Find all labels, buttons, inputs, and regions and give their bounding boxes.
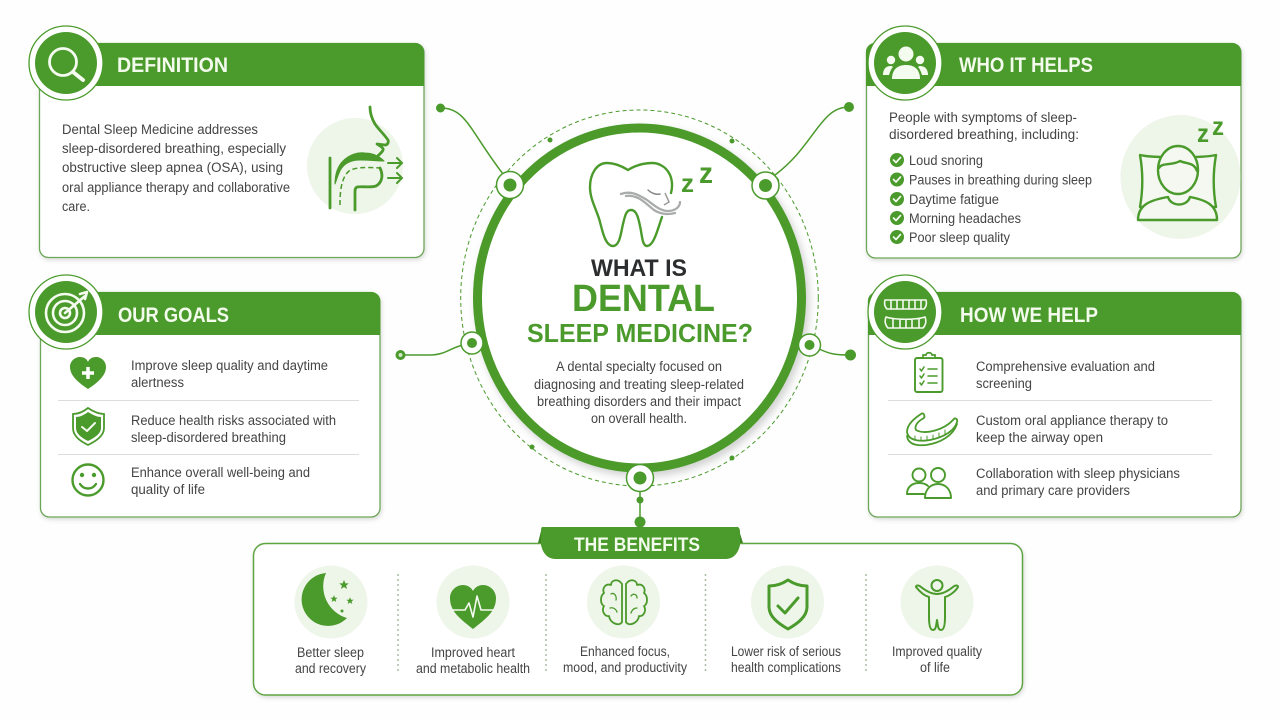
help 1: Comprehensive evaluation and	[976, 359, 1155, 374]
help 3: and primary care providers	[976, 483, 1130, 498]
panel: our goals	[29, 275, 380, 517]
icon: oral appliance	[907, 413, 957, 445]
node: top right	[752, 172, 779, 199]
centre description: breathing disorders and their impact	[537, 394, 741, 409]
icon: clipboard	[915, 353, 942, 392]
definition text	[62, 122, 290, 214]
goal 1	[70, 357, 328, 390]
connector: our goals to centre	[396, 345, 463, 360]
help 3: Collaboration with sleep physicians	[976, 466, 1180, 481]
panel: the benefits	[254, 527, 1022, 695]
benefit 5: of life	[920, 660, 950, 675]
central circle	[461, 110, 820, 492]
panel: who it helps	[866, 26, 1241, 258]
goal 3: Enhance overall well-being and	[131, 465, 310, 480]
connector: benefits to centre	[634, 490, 646, 528]
symptoms list: Daytime fatigue	[909, 192, 999, 207]
how heading: HOW WE HELP	[960, 304, 1098, 327]
symptoms list	[890, 153, 1092, 245]
symptoms list: Morning headaches	[909, 211, 1021, 226]
benefit 3: Enhanced focus,	[580, 644, 670, 659]
help 2	[907, 413, 1168, 445]
symptoms list: Loud snoring	[909, 153, 983, 168]
goal 2: sleep-disordered breathing	[131, 430, 286, 445]
centre description: on overall health.	[591, 411, 687, 426]
node: right	[798, 334, 820, 356]
centre description	[534, 359, 744, 426]
benefit 4: Lower risk of serious	[731, 644, 841, 659]
panel: how we help	[868, 275, 1241, 517]
icon: two people	[907, 468, 951, 498]
benefit 3: mood, and productivity	[563, 660, 687, 675]
icon: sleeping person: z	[1212, 113, 1224, 141]
symptoms list: Pauses in breathing during sleep	[909, 172, 1092, 188]
centre description: diagnosing and treating sleep-related	[534, 377, 744, 392]
title	[527, 255, 753, 348]
how header bar	[868, 292, 1241, 335]
benefit 4	[731, 566, 841, 675]
icon: sleeping person: z	[1197, 118, 1209, 148]
benefit 2: Improved heart	[431, 645, 515, 660]
benefit 1: and recovery	[295, 661, 366, 676]
benefit 5: Improved quality	[892, 644, 982, 659]
icon: shield with check	[769, 580, 807, 629]
node: left	[461, 332, 483, 354]
node: bottom	[626, 464, 654, 492]
icon: person with raised arms	[916, 580, 958, 630]
definition text: obstructive sleep apnea (OSA), using	[62, 160, 283, 175]
definition text: sleep-disordered breathing, especially	[62, 141, 286, 156]
title: SLEEP MEDICINE?	[527, 318, 753, 348]
goals badge: target	[29, 275, 103, 349]
benefit 3	[563, 566, 687, 675]
symptoms list: Poor sleep quality	[909, 230, 1010, 245]
who badge: people	[868, 26, 942, 100]
icon: moon and stars	[302, 573, 354, 626]
definition heading: DEFINITION	[117, 54, 228, 77]
goal 3	[72, 464, 310, 497]
help 2: keep the airway open	[976, 430, 1103, 445]
help 3	[907, 466, 1180, 498]
icon: smiley	[72, 464, 104, 496]
connector: how we help to centre	[819, 349, 856, 360]
who intro text: People with symptoms of sleep-	[889, 110, 1077, 125]
goal 1: alertness	[131, 375, 184, 390]
centre description: A dental specialty focused on	[556, 359, 722, 374]
icon: sleeping person	[1120, 113, 1240, 239]
benefit 2	[416, 566, 530, 676]
goal 2	[73, 408, 336, 445]
who intro text: disordered breathing, including:	[889, 127, 1079, 142]
icon: sleeping tooth: z	[699, 157, 713, 190]
goals header bar	[40, 292, 380, 335]
definition badge: magnifier	[29, 26, 103, 100]
icon: airway profile	[307, 107, 403, 214]
benefit 1: Better sleep	[297, 645, 364, 660]
icon: sleeping tooth	[590, 157, 713, 246]
connector: who it helps to centre	[775, 102, 854, 175]
benefits banner	[538, 527, 743, 559]
icon: shield with check	[73, 408, 104, 445]
node: top left	[496, 172, 524, 198]
icon: heart with pulse	[450, 585, 496, 629]
benefit 1	[294, 566, 368, 676]
how badge: dentures	[868, 275, 942, 349]
help 1: screening	[976, 376, 1032, 391]
who heading: WHO IT HELPS	[959, 54, 1093, 77]
title: WHAT IS	[591, 255, 687, 282]
definition text: oral appliance therapy and collaborative	[62, 180, 290, 195]
definition text: Dental Sleep Medicine addresses	[62, 122, 258, 137]
help 1	[915, 353, 1155, 392]
panel: definition	[29, 26, 424, 258]
icon: brain	[601, 580, 647, 624]
icon: sleeping tooth: z	[681, 168, 694, 198]
definition header bar	[39, 43, 424, 86]
benefit 5	[892, 566, 982, 675]
icon: heart with plus	[70, 357, 106, 389]
goal 3: quality of life	[131, 482, 205, 497]
connector: definition to centre	[436, 104, 503, 174]
benefits banner: THE BENEFITS	[574, 534, 700, 556]
definition text: care.	[62, 199, 90, 214]
benefit 2: and metabolic health	[416, 661, 530, 676]
goals heading: OUR GOALS	[118, 304, 229, 327]
title: DENTAL	[572, 278, 715, 320]
who header bar	[866, 43, 1241, 86]
goal 1: Improve sleep quality and daytime	[131, 358, 328, 373]
benefit 4: health complications	[731, 660, 841, 675]
who intro text	[889, 110, 1079, 142]
help 2: Custom oral appliance therapy to	[976, 413, 1168, 428]
goal 2: Reduce health risks associated with	[131, 413, 336, 428]
